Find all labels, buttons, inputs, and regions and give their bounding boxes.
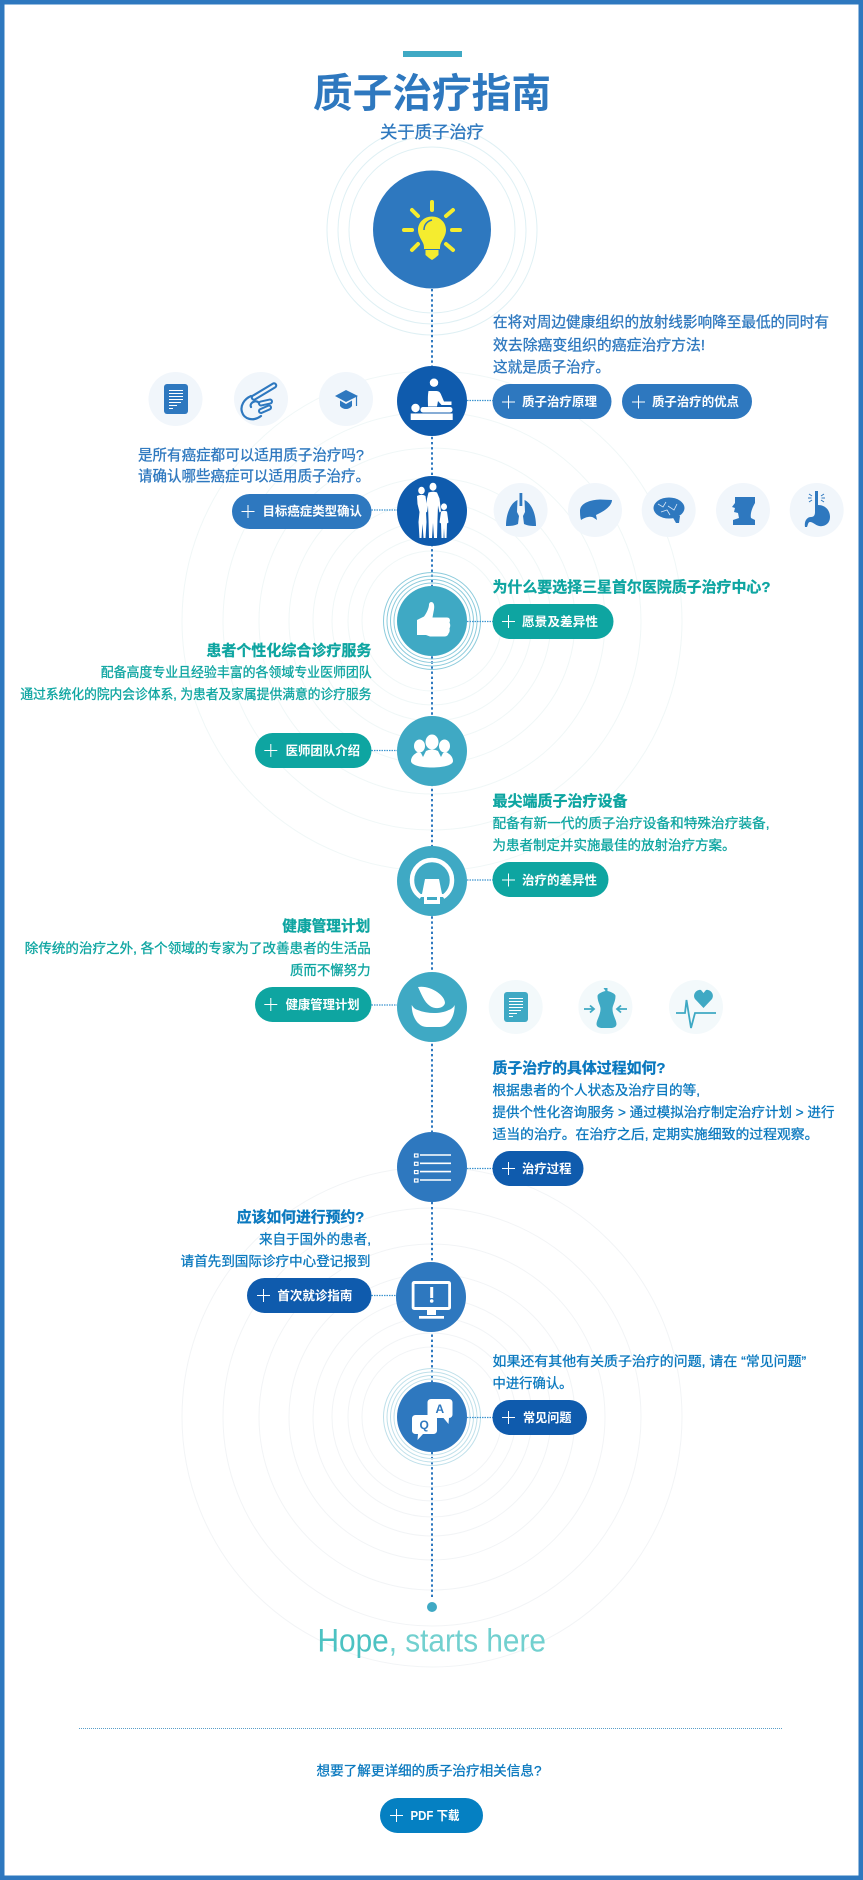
timeline dotted line — [431, 289, 433, 1597]
timeline end dot — [427, 1602, 437, 1612]
button: target cancers — [232, 494, 372, 529]
intro text: 在将对周边健康组织的放射线影响降至最低的同时有 — [493, 314, 829, 331]
icon: checklist circle — [397, 1132, 467, 1202]
health plan text: 除传统的治疗之外, 各个领域的专家为了改善患者的生活品 — [25, 940, 371, 956]
equipment text: 为患者制定并实施最佳的放射治疗方案。 — [492, 837, 736, 853]
title: 质子治疗指南 — [313, 72, 551, 116]
button: vision: 愿景及差异性 — [522, 614, 598, 629]
closing question: 想要了解更详细的质子治疗相关信息? — [316, 1762, 542, 1778]
connector — [372, 750, 397, 752]
connector — [467, 1168, 492, 1170]
slogan: Hope, starts here — [318, 1622, 546, 1658]
icon: bowl and leaf circle — [397, 972, 467, 1042]
connector — [467, 879, 492, 881]
intro text: 这就是质子治疗。 — [493, 359, 610, 376]
icon: graduation cap — [319, 372, 373, 426]
connector — [467, 620, 492, 622]
button: faq: 常见问题 — [523, 1410, 572, 1425]
button: treatment differences: 治疗的差异性 — [522, 872, 597, 888]
personalized care text: 配备高度专业且经验丰富的各领域专业医师团队 — [101, 664, 372, 680]
icon: stomach — [790, 483, 844, 537]
equipment text: 配备有新一代的质子治疗设备和特殊治疗装备, — [492, 815, 770, 831]
health plan text — [25, 917, 371, 978]
icon: massage treatment circle — [397, 366, 467, 436]
appointment text: 来自于国外的患者, — [259, 1232, 371, 1247]
connector — [467, 1416, 492, 1418]
connector — [467, 400, 492, 402]
subtitle: 关于质子治疗 — [380, 122, 484, 142]
icon: light bulb circle — [373, 170, 491, 288]
icon: head and neck — [716, 483, 770, 537]
icon: team circle — [397, 716, 467, 786]
button: process: 治疗过程 — [522, 1161, 572, 1176]
button: health plan: 健康管理计划 — [286, 997, 360, 1012]
appointment text: 请首先到国际诊疗中心登记报到 — [180, 1254, 370, 1269]
faq text — [492, 1354, 806, 1391]
intro text — [493, 314, 829, 376]
treatment process text — [492, 1059, 834, 1142]
icon: monitor circle — [396, 1262, 466, 1332]
connector — [372, 1294, 396, 1296]
cancer question text — [138, 447, 370, 485]
equipment text — [492, 792, 770, 853]
button: health plan — [255, 987, 372, 1022]
icon: heart and pulse — [669, 980, 723, 1034]
treatment process text: 适当的治疗。在治疗之后, 定期实施细致的过程观察。 — [492, 1126, 818, 1142]
connector — [372, 509, 397, 511]
connector — [372, 1004, 397, 1006]
cancer question text: 请确认哪些癌症可以适用质子治疗。 — [138, 468, 370, 485]
title accent bar — [403, 51, 462, 57]
button: faq — [492, 1400, 587, 1435]
faq text: 中进行确认。 — [492, 1376, 572, 1391]
icon: Q and A circle — [384, 1368, 480, 1466]
button: advantages: 质子治疗的优点 — [652, 394, 739, 409]
health plan text: 质而不懈努力 — [290, 962, 370, 978]
appointment text — [180, 1208, 371, 1269]
icon: brain — [642, 483, 696, 537]
icon: family circle — [397, 476, 467, 546]
icon: body shape — [578, 980, 632, 1034]
icon: document — [148, 372, 202, 426]
why choose heading: 为什么要选择三星首尔医院质子治疗中心? — [492, 578, 770, 596]
button: advantages — [622, 384, 752, 419]
button: pdf download — [380, 1798, 483, 1833]
icon: liver — [568, 483, 622, 537]
personalized care text: 患者个性化综合诊疗服务 — [206, 642, 371, 660]
faq text: 如果还有其他有关质子治疗的问题, 请在 “常见问题” — [492, 1354, 806, 1369]
button: treatment differences — [492, 862, 608, 897]
icon: lungs — [494, 483, 548, 537]
button: doctors — [255, 733, 372, 768]
button: pdf download: PDF 下载 — [410, 1808, 460, 1823]
icon: pointing hand — [234, 372, 288, 426]
cancer question text: 是所有癌症都可以适用质子治疗吗? — [138, 447, 364, 464]
icon: scanner circle — [397, 846, 467, 916]
equipment text: 最尖端质子治疗设备 — [492, 792, 628, 810]
icon: Q and A circle: Q — [420, 1418, 429, 1432]
button: vision — [492, 604, 614, 639]
personalized care text — [20, 642, 372, 702]
button: process — [492, 1151, 584, 1186]
button: first visit — [247, 1278, 372, 1313]
treatment process text: 提供个性化咨询服务 > 通过模拟治疗制定治疗计划 > 进行 — [492, 1105, 834, 1120]
button: doctors: 医师团队介绍 — [286, 743, 360, 758]
button: first visit: 首次就诊指南 — [277, 1288, 352, 1303]
icon: thumbs up circle — [384, 572, 480, 670]
icon: Q and A circle: A — [436, 1402, 444, 1416]
button: target cancers: 目标癌症类型确认 — [262, 504, 362, 518]
health plan text: 健康管理计划 — [282, 917, 370, 935]
treatment process text: 质子治疗的具体过程如何? — [492, 1059, 666, 1077]
treatment process text: 根据患者的个人状态及治疗目的等, — [492, 1082, 700, 1098]
appointment text: 应该如何进行预约? — [237, 1208, 364, 1226]
intro text: 效去除癌变组织的癌症治疗方法! — [493, 337, 705, 354]
button: principle — [492, 384, 612, 419]
icon: record document — [489, 980, 543, 1034]
button: principle: 质子治疗原理 — [522, 394, 597, 409]
personalized care text: 通过系统化的院内会诊体系, 为患者及家属提供满意的诊疗服务 — [20, 686, 371, 702]
